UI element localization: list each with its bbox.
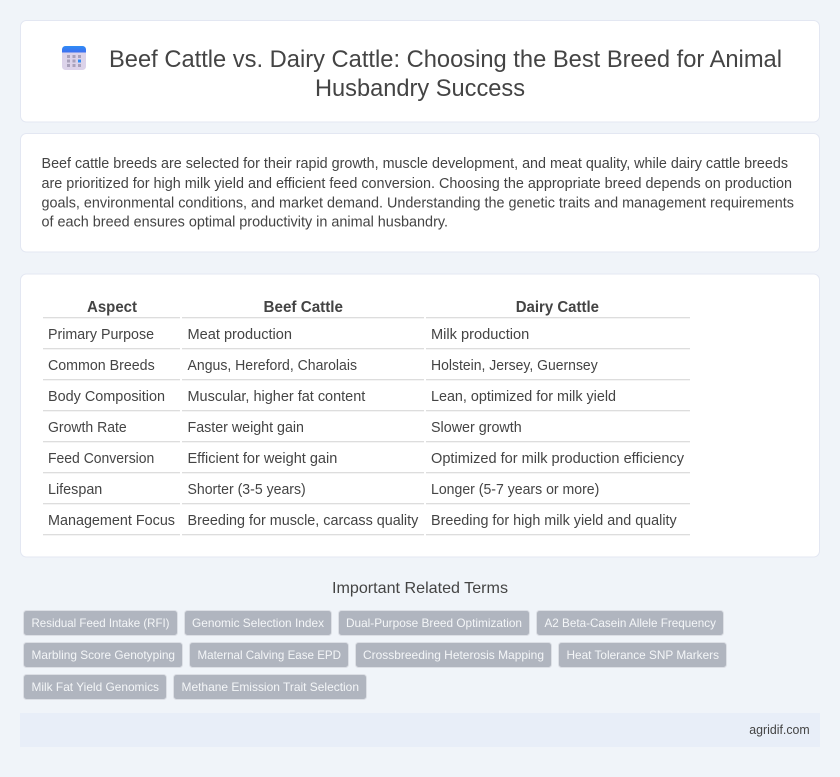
tag list: related terms [24,610,726,700]
table header: Aspect [87,299,138,316]
table row: management focus: Breeding for high milk yield and quality [431,513,677,529]
table row: body composition: Lean, optimized for milk yield [431,389,616,405]
table row: body composition: Body Composition [48,389,165,405]
text block: introduction [42,156,794,230]
tag [190,642,348,668]
table header: Beef Cattle [264,299,343,316]
icon: calendar [62,46,86,70]
tag: Methane Emission Trait Selection [182,680,359,694]
tag: Marbling Score Genotyping [32,648,175,662]
tag [24,674,166,700]
table row: common breeds: Common Breeds [48,358,155,374]
tag [174,674,366,700]
text block: introduction: goals, environmental conditions, and market demand. Understanding the genetic traits and management requirements [42,196,794,212]
table row: body composition: Muscular, higher fat content [188,389,365,405]
tag: Genomic Selection Index [192,616,324,630]
table row: primary purpose: Primary Purpose [48,327,154,343]
title: Beef Cattle vs. Dairy Cattle: Choosing the Best Breed for Animal [109,46,782,73]
title [109,46,782,102]
table row: feed conversion: Feed Conversion [48,451,154,467]
panel: header [20,20,820,122]
tag [24,642,182,668]
text block: introduction: are prioritized for high milk yield and efficient feed conversion. Choosing the appropriate breed depends on production [42,176,792,192]
tag: Dual-Purpose Breed Optimization [346,616,522,630]
table row: primary purpose [43,327,690,349]
footer [20,713,820,747]
tag: Milk Fat Yield Genomics [32,680,159,694]
table row: body composition [43,389,690,411]
table row: primary purpose: Milk production [431,327,529,343]
table row: primary purpose: Meat production [188,327,292,343]
footer: agridif.com [749,723,810,737]
table row: growth rate [43,420,690,442]
tag [338,610,530,636]
table row: common breeds: Holstein, Jersey, Guernsey [431,358,598,374]
table row: common breeds [43,358,690,380]
panel: comparison table [20,274,820,557]
text block: introduction: of each breed ensures optimal productivity in animal husbandry. [42,214,448,230]
table row: management focus: Management Focus [48,513,175,529]
tag [184,610,332,636]
tag [356,642,552,668]
table row: lifespan: Longer (5-7 years or more) [431,482,599,498]
table row: feed conversion: Efficient for weight gain [188,451,337,467]
table row: growth rate: Slower growth [431,420,522,436]
tag [24,610,178,636]
table row: lifespan [43,482,690,504]
tag [536,610,724,636]
table row: lifespan: Shorter (3-5 years) [188,482,306,498]
tag: Residual Feed Intake (RFI) [32,616,170,630]
tag: A2 Beta-Casein Allele Frequency [544,616,716,630]
tag: Heat Tolerance SNP Markers [566,648,719,662]
table row: growth rate: Faster weight gain [188,420,304,436]
table row: lifespan: Lifespan [48,482,102,498]
heading: related terms: Important Related Terms [332,580,508,597]
tag: Crossbreeding Heterosis Mapping [363,648,544,662]
tag: Maternal Calving Ease EPD [198,648,341,662]
table row: feed conversion [43,451,690,473]
table row: management focus: Breeding for muscle, carcass quality [188,513,419,529]
table row: management focus [43,513,690,535]
title: Husbandry Success [315,75,525,102]
table header [43,299,690,318]
table row: growth rate: Growth Rate [48,420,127,436]
text block: introduction: Beef cattle breeds are selected for their rapid growth, muscle development, and meat quality, while dairy cattle breeds [42,156,788,172]
table row: common breeds: Angus, Hereford, Charolais [188,358,357,374]
tag [558,642,726,668]
table header: Dairy Cattle [516,299,599,316]
panel: introduction [20,134,820,252]
table row: feed conversion: Optimized for milk production efficiency [431,451,685,467]
